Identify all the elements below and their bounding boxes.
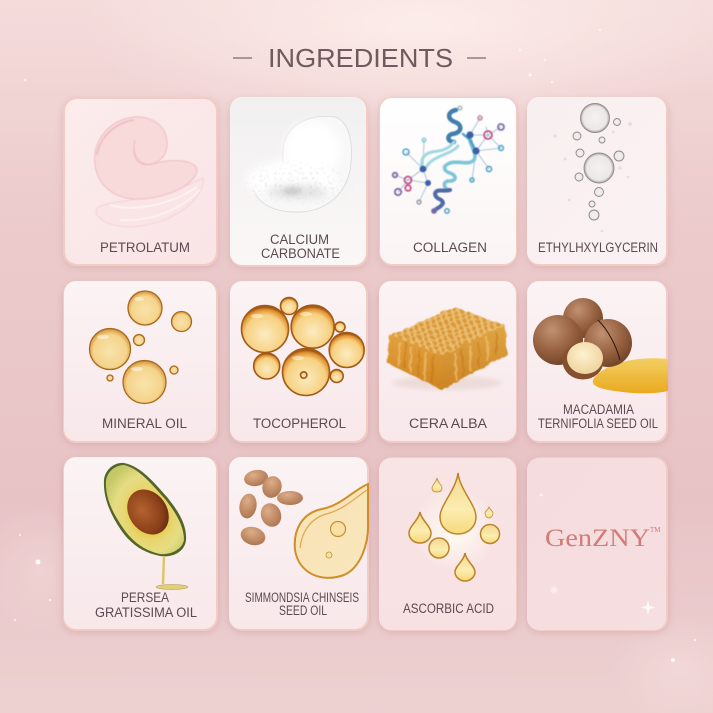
label: ethylhxylgycerin: ETHYLHXYLGYCERIN	[538, 240, 658, 255]
panel: simmondsia chinseis seed oil	[229, 457, 369, 632]
icon: avocado	[104, 463, 188, 590]
label: calcium carbonate	[261, 232, 340, 261]
label: simmondsia chinseis seed oil	[245, 590, 359, 618]
label: persea gratissima oil	[95, 590, 197, 620]
icon: honeycomb	[387, 307, 507, 390]
label: simmondsia chinseis seed oil: SIMMONDSIA CHINSEIS	[245, 590, 359, 605]
logo: GenZNY: TM	[650, 526, 661, 534]
icon: jojoba beans and oil	[237, 468, 368, 578]
label: collagen: COLLAGEN	[413, 240, 487, 255]
panel: ethylhxylgycerin	[527, 97, 668, 267]
label: macadamia ternifolia seed oil: MACADAMIA	[563, 402, 634, 417]
panel: collagen	[379, 97, 517, 267]
panel: cera alba	[379, 281, 517, 444]
icon: calcium powder	[244, 116, 352, 212]
icon: petrolatum swirl	[95, 117, 203, 227]
label: calcium carbonate: CALCIUM	[270, 232, 329, 247]
label: persea gratissima oil: GRATISSIMA OIL	[95, 605, 197, 620]
panel: petrolatum	[63, 97, 218, 267]
panel: persea gratissima oil	[63, 457, 218, 632]
label: ascorbic acid: ASCORBIC ACID	[403, 601, 494, 616]
panel: macadamia	[527, 281, 668, 444]
panel: calcium carbonate	[230, 97, 368, 268]
icon: ascorbic droplets	[409, 473, 500, 581]
icon: tocopherol droplets	[242, 298, 364, 396]
icon: macadamia nuts	[533, 298, 668, 393]
icon: bubbles	[553, 104, 632, 232]
label: petrolatum: PETROLATUM	[100, 240, 190, 255]
icon: collagen molecule	[393, 106, 504, 213]
title: INGREDIENTS	[268, 43, 453, 73]
label: tocopherol: TOCOPHEROL	[253, 416, 346, 431]
label: cera alba: CERA ALBA	[409, 416, 487, 431]
panel: mineral oil	[63, 281, 218, 444]
label: calcium carbonate: CARBONATE	[261, 246, 340, 261]
icon: oil droplets	[90, 291, 192, 404]
label: simmondsia chinseis seed oil: SEED OIL	[279, 603, 327, 618]
panel: brand	[527, 457, 668, 632]
label: persea gratissima oil: PERSEA	[121, 590, 169, 605]
logo: GenZNY: GenZNY	[545, 525, 650, 552]
label: mineral oil: MINERAL OIL	[102, 416, 187, 431]
panel: tocopherol	[230, 281, 368, 444]
label: macadamia ternifolia seed oil	[538, 402, 658, 431]
decorative sparkles	[540, 494, 656, 615]
label: macadamia ternifolia seed oil: TERNIFOLIA SEED OIL	[538, 416, 658, 431]
panel: ascorbic acid	[379, 457, 517, 632]
